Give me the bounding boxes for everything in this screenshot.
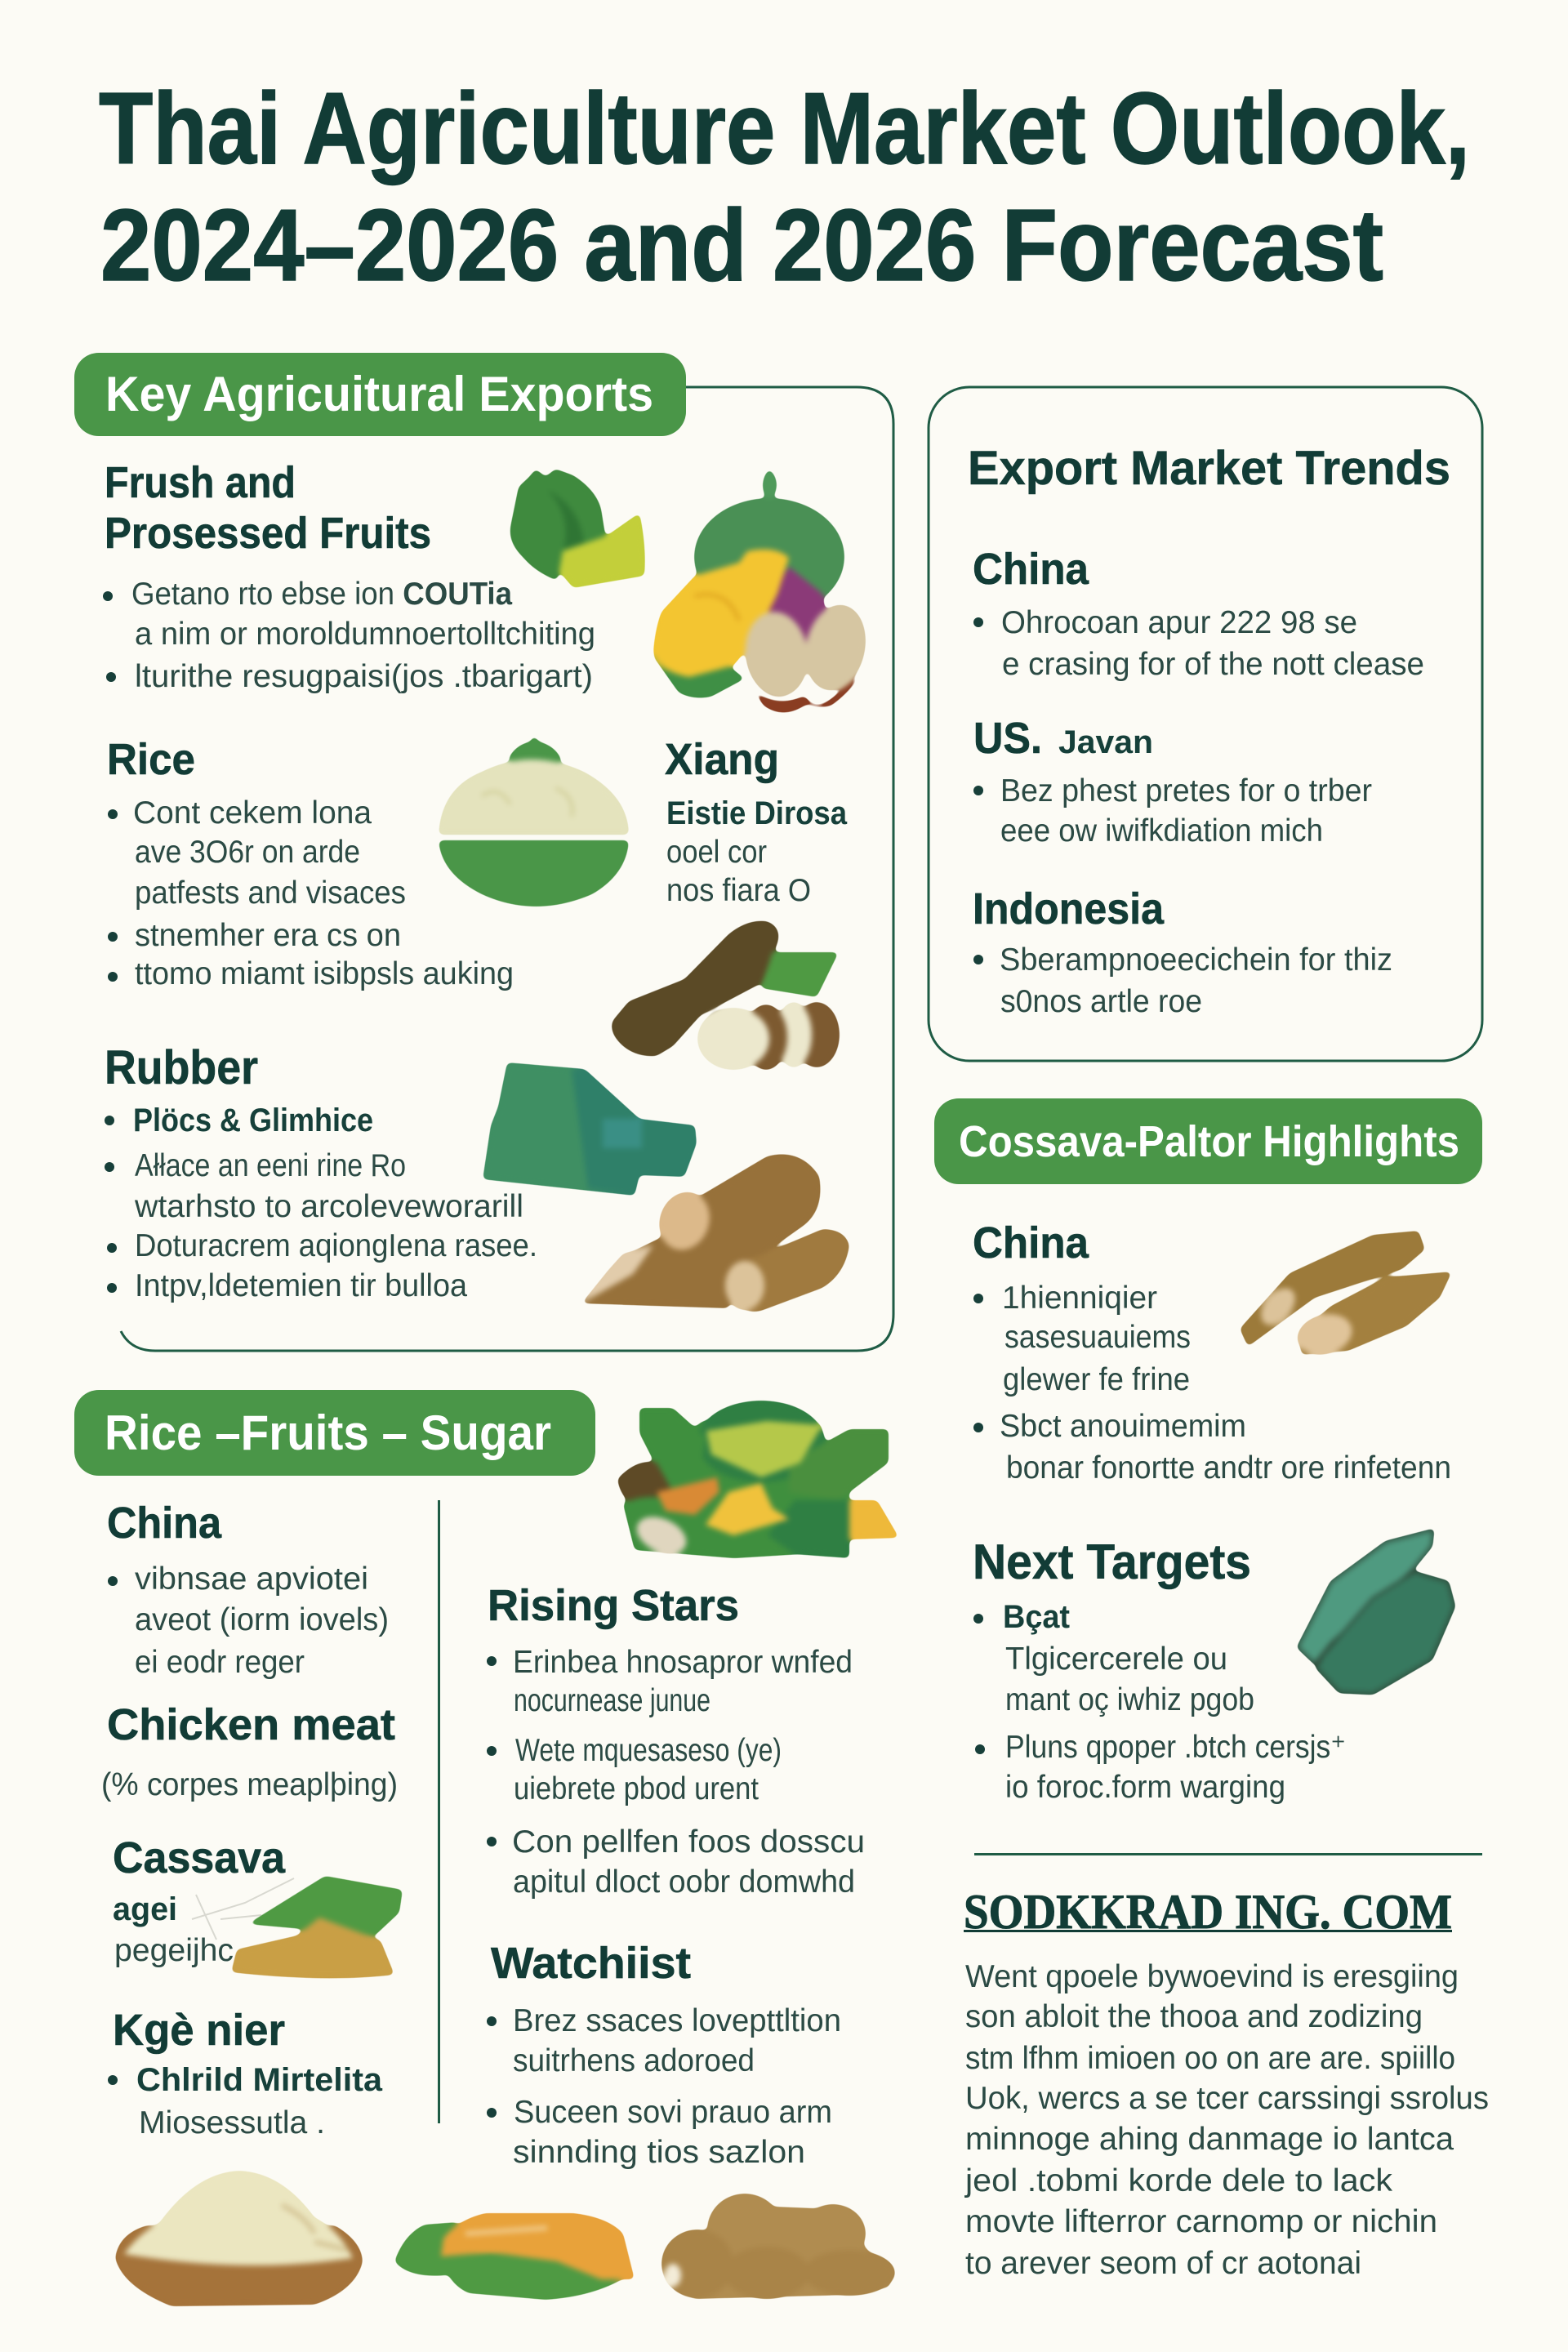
text block: watchlist: Watchiist bbox=[491, 1939, 691, 1988]
text block: xiang: Eistie Dirosa bbox=[666, 795, 848, 831]
source paragraph: stm lfhm imioen oo on are are. spiillo bbox=[965, 2041, 1455, 2076]
text block: fruits bbox=[103, 458, 595, 694]
text block: china highlights: glewer fe frine bbox=[1003, 1362, 1190, 1397]
text block: china bbox=[107, 1499, 389, 1680]
text block: china trend: Ohrocoan apur 222 98 se bbox=[1001, 605, 1357, 640]
text block: china highlights: sasesuauiems bbox=[1004, 1320, 1191, 1355]
text block: rubber: Doturacrem aqiongIena rasee. bbox=[135, 1228, 537, 1263]
text block: china trend: e crasing for of the nott clease bbox=[1002, 647, 1424, 682]
text block: next targets: Pluns qpoper .btch cersjs⁺ bbox=[1005, 1730, 1346, 1765]
text block: rubber: Plöcs & Glimhice bbox=[133, 1102, 373, 1138]
source paragraph: Uok, wercs a se tcer carssingi ssrolus bbox=[965, 2081, 1489, 2116]
text block: us japan trend: eee ow iwifkdiation mich bbox=[1000, 813, 1323, 849]
panel: rice fruits sugar bbox=[74, 1390, 899, 2306]
text block: us japan trend bbox=[973, 714, 1372, 849]
text block: rubber bbox=[105, 1041, 537, 1303]
text block: china trend: China bbox=[973, 545, 1089, 594]
icon: cassava root bbox=[581, 1154, 849, 1312]
text block: rice: ttomo miamt isibpsls auking bbox=[135, 956, 514, 991]
text block: next targets: Tlgicercerele ou bbox=[1005, 1642, 1227, 1677]
text block: next targets: io foroc.form warging bbox=[1005, 1770, 1285, 1805]
icon: cassava sticks bbox=[1240, 1231, 1452, 1361]
text block: watchlist: sinnding tios sazlon bbox=[513, 2135, 805, 2170]
text block: us japan trend: US. bbox=[973, 714, 1042, 763]
icon: sugar bowl bbox=[115, 2171, 363, 2306]
text block: rising stars: apitul dloct oobr domwhd bbox=[513, 1864, 855, 1900]
text block: cassava: agei bbox=[113, 1891, 177, 1927]
text block: xiang: nos fiara O bbox=[666, 873, 811, 908]
text block: kge nier: Kgè nier bbox=[113, 2006, 285, 2055]
text block: china highlights: China bbox=[973, 1218, 1089, 1267]
heading pill: rice fruits sugar: Rice –Fruits – Sugar bbox=[105, 1405, 551, 1460]
text block: watchlist: suitrhens adoroed bbox=[513, 2043, 755, 2078]
text block: rice: stnemher era cs on bbox=[135, 918, 401, 953]
icon: vegetable pile bbox=[617, 1401, 899, 1561]
leaf and mound bbox=[231, 1876, 403, 1978]
text block: china highlights: Sbct anouimemim bbox=[1000, 1409, 1246, 1444]
text block: china highlights bbox=[973, 1218, 1451, 1486]
text block: china highlights: 1hienniqier bbox=[1002, 1281, 1157, 1316]
text block: xiang bbox=[665, 735, 848, 908]
text block: fruits: a nim or moroldumnoertolltchiting bbox=[135, 617, 595, 652]
text block: china: China bbox=[107, 1499, 222, 1548]
text block: rising stars: uiebrete pbod urent bbox=[514, 1771, 759, 1806]
text block: china: ei eodr reger bbox=[135, 1645, 305, 1680]
divider line bbox=[974, 1853, 1482, 1855]
icon: leafy greens bbox=[510, 469, 645, 588]
text block: cassava: Cassava bbox=[113, 1833, 286, 1882]
text block: watchlist: Suceen sovi prauo arm bbox=[514, 2095, 832, 2130]
text block: next targets: mant oç iwhiz pgob bbox=[1005, 1682, 1254, 1717]
text block: rice: Cont cekem lona bbox=[133, 795, 372, 831]
text block: rice: patfests and visaces bbox=[135, 875, 406, 911]
text block: us japan trend: Javan bbox=[1058, 724, 1153, 760]
heading pill: cassava highlights: Cossava-Paltor Highlights bbox=[959, 1117, 1459, 1166]
text block: watchlist bbox=[487, 1939, 841, 2170]
icon: yam and slices bbox=[612, 921, 840, 1070]
text block: indonesia trend: Sberampnoeecichein for thiz bbox=[1000, 942, 1392, 978]
text block: china highlights: bonar fonortte andtr ore rinfetenn bbox=[1006, 1450, 1451, 1486]
text block: chicken meat bbox=[101, 1700, 398, 1802]
column divider bbox=[438, 1500, 440, 2123]
text block: rubber: Ałłace an eeni rine Ro bbox=[135, 1148, 406, 1183]
text block: fruits: lturithe resugpaisi(jos .tbarigart) bbox=[135, 659, 593, 694]
icon: rubber bottle bbox=[483, 1062, 697, 1196]
title: 2024–2026 and 2026 Forecast bbox=[100, 189, 1383, 302]
text block: fruits: Prosessed Fruits bbox=[105, 509, 431, 558]
text block: rubber: wtarhsto to arcoleveworarill bbox=[134, 1189, 523, 1224]
source paragraph bbox=[964, 1959, 1489, 2281]
text block: indonesia trend bbox=[973, 884, 1392, 1019]
icon: green seed pods bbox=[1298, 1530, 1454, 1694]
icon: cassava with leaf bbox=[192, 1876, 403, 1978]
heading: export market trends: Export Market Trends bbox=[968, 442, 1450, 495]
source paragraph: movte lifterror carnomp or nichin bbox=[965, 2204, 1437, 2239]
panel: export market trends bbox=[929, 387, 1482, 1061]
icon: tropical fruit bbox=[653, 469, 873, 713]
text block: china trend bbox=[973, 545, 1424, 682]
text block: indonesia trend: Indonesia bbox=[973, 884, 1165, 933]
heading pill: key agricultural exports bbox=[74, 353, 686, 436]
source paragraph: to arever seom of cr aotonai bbox=[965, 2246, 1361, 2281]
source paragraph: son abloit the thooa and zodizing bbox=[965, 1999, 1423, 2034]
text block: rubber: Intpv,ldetemien tir bulloa bbox=[135, 1268, 467, 1303]
text block: rising stars: Rising Stars bbox=[488, 1581, 739, 1630]
text block: xiang: Xiang bbox=[665, 735, 779, 784]
text block: rice: Rice bbox=[107, 735, 195, 784]
text block: next targets bbox=[973, 1535, 1346, 1805]
title bbox=[99, 73, 1470, 302]
source paragraph: jeol .tobmi korde dele to lack bbox=[964, 2163, 1393, 2198]
text block: watchlist: Brez ssaces lovepttltion bbox=[513, 2003, 841, 2038]
heading pill: rice fruits sugar bbox=[74, 1390, 595, 1476]
text block: kge nier: Miosessutla . bbox=[139, 2105, 325, 2140]
text block: rising stars: nocurnease junue bbox=[514, 1683, 710, 1718]
icon: leaf and mango bbox=[394, 2213, 635, 2300]
text block: rising stars: Wete mquesaseso (ye) bbox=[515, 1733, 782, 1768]
text block: xiang: ooel cor bbox=[666, 835, 767, 870]
heading pill: cassava highlights bbox=[934, 1098, 1482, 1184]
source heading: SODKKRAD ING. COM bbox=[964, 1885, 1452, 1939]
text block: chicken meat: Chicken meat bbox=[107, 1700, 395, 1749]
text block: cassava bbox=[113, 1833, 286, 1968]
text block: source website bbox=[964, 1885, 1489, 2281]
panel: key agricultural exports bbox=[74, 353, 893, 1351]
heading pill: key agricultural exports: Key Agricuitural Exports bbox=[105, 367, 653, 421]
text block: fruits: Frush and bbox=[105, 458, 296, 507]
text block: next targets: Bçat bbox=[1003, 1599, 1070, 1635]
source paragraph: Went qpoele bywoevind is eresgiing bbox=[965, 1959, 1459, 1994]
text block: kge nier: Chlrild Mirtelita bbox=[136, 2062, 383, 2098]
text block: rice: ave 3O6r on arde bbox=[135, 835, 360, 870]
text block: china: aveot (iorm iovels) bbox=[135, 1602, 389, 1637]
source paragraph: minnoge ahing danmage io lantca bbox=[965, 2122, 1454, 2157]
text block: rising stars bbox=[487, 1581, 865, 1900]
text block: next targets: Next Targets bbox=[973, 1535, 1251, 1589]
text block: rubber: Rubber bbox=[105, 1041, 258, 1094]
panel: cassava highlights bbox=[934, 1098, 1482, 1805]
icon: tuber pile bbox=[662, 2194, 895, 2299]
text block: rising stars: Con pellfen foos dosscu bbox=[512, 1824, 865, 1860]
text block: kge nier bbox=[108, 2006, 383, 2140]
text block: rice bbox=[107, 735, 514, 991]
text block: cassava: pegeijhc bbox=[114, 1933, 234, 1968]
icon: rice bowl bbox=[439, 735, 629, 906]
text block: us japan trend: Bez phest pretes for o trber bbox=[1000, 773, 1372, 808]
text block: indonesia trend: s0nos artle roe bbox=[1000, 984, 1202, 1019]
text block: chicken meat: (% corpes meaplþing) bbox=[101, 1767, 398, 1802]
text block: rising stars: Erinbea hnosapror wnfed bbox=[513, 1645, 853, 1680]
text block: china: vibnsae apviotei bbox=[135, 1561, 368, 1597]
text block: fruits: Getano rto ebse ion COUTia bbox=[131, 577, 512, 612]
